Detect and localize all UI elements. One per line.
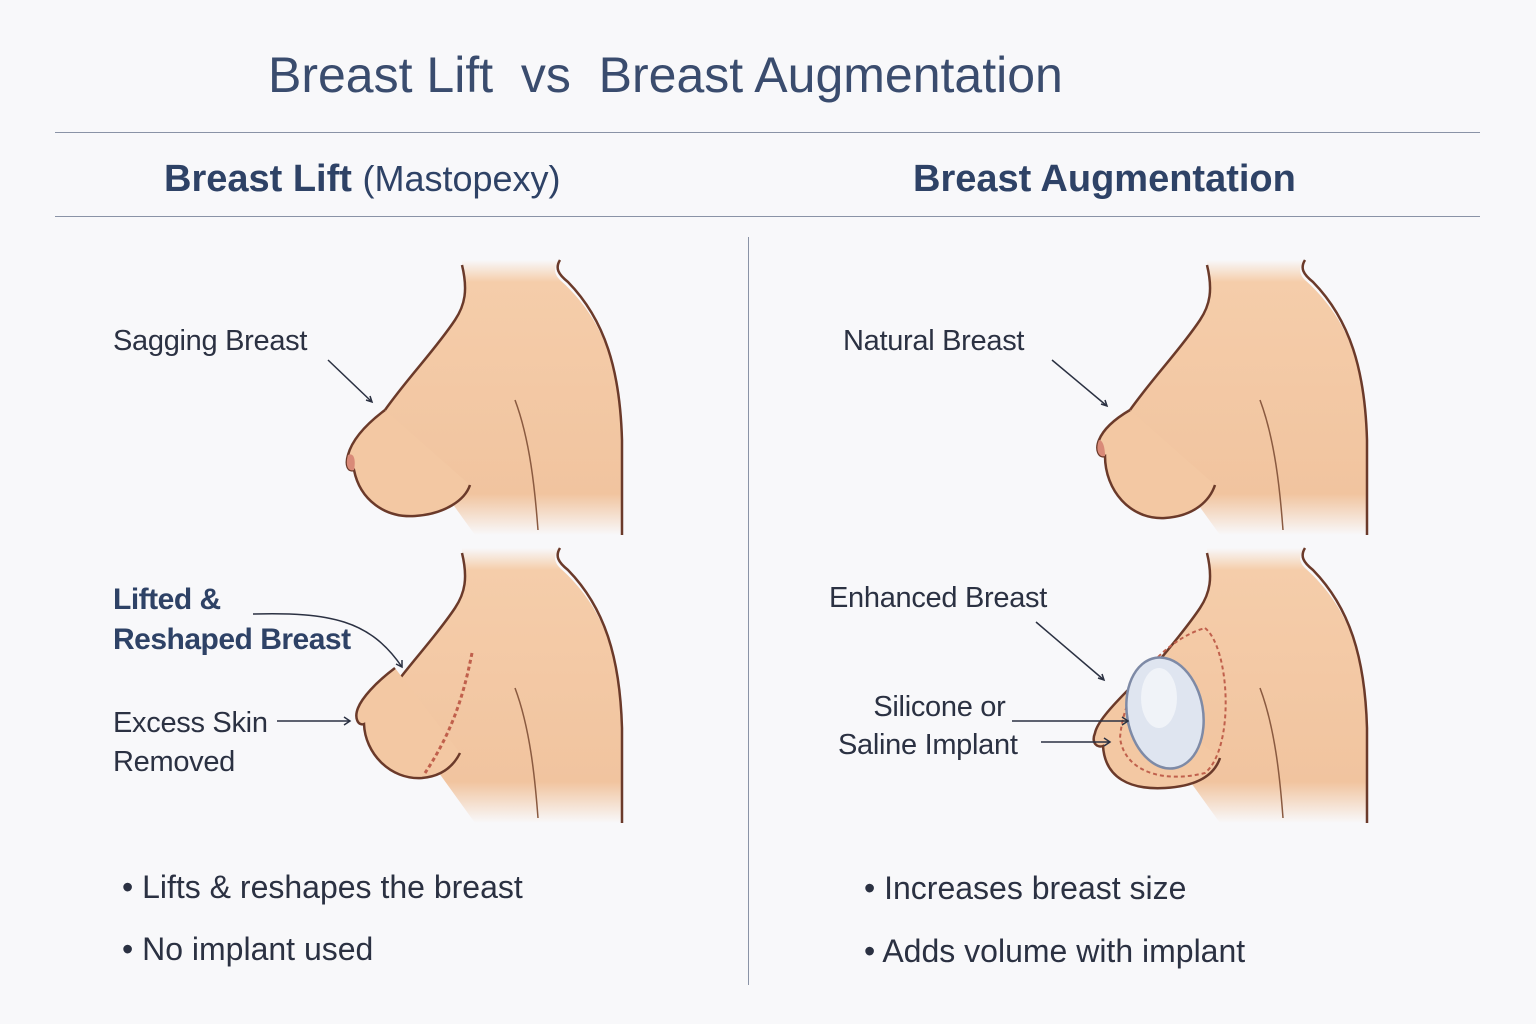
bullets: augmentation: • Increases breast size xyxy=(864,870,1186,906)
bullets: augmentation xyxy=(864,870,1245,969)
label: implant: Saline Implant xyxy=(838,729,1018,761)
bullets: lift xyxy=(122,869,523,967)
label: sagging breast: Sagging Breast xyxy=(113,325,307,357)
bullets: augmentation: • Adds volume with implant xyxy=(864,933,1245,969)
figure: natural breast xyxy=(1097,260,1367,535)
label: implant xyxy=(838,691,1018,761)
label: implant: Silicone or xyxy=(873,691,1005,723)
title: Breast Lift vs Breast Augmentation xyxy=(268,47,1063,103)
label: natural breast: Natural Breast xyxy=(843,325,1024,357)
figure: sagging breast xyxy=(347,260,622,535)
label: excess skin removed: Removed xyxy=(113,746,235,778)
bullets: lift: • No implant used xyxy=(122,931,373,967)
arrows xyxy=(253,360,1128,746)
label: lifted & reshaped xyxy=(113,583,351,656)
bullets: lift: • Lifts & reshapes the breast xyxy=(122,869,523,905)
heading: breast lift: Breast Lift (Mastopexy) xyxy=(164,158,561,200)
heading: breast augmentation: Breast Augmentation xyxy=(913,158,1296,200)
label: excess skin removed: Excess Skin xyxy=(113,707,268,739)
label: excess skin removed xyxy=(113,707,268,778)
label: enhanced breast: Enhanced Breast xyxy=(829,582,1047,614)
label: lifted & reshaped: Reshaped Breast xyxy=(113,623,351,656)
label: lifted & reshaped: Lifted & xyxy=(113,583,221,616)
figure: enhanced breast with implant xyxy=(1094,548,1367,823)
figure: lifted breast xyxy=(356,548,622,823)
